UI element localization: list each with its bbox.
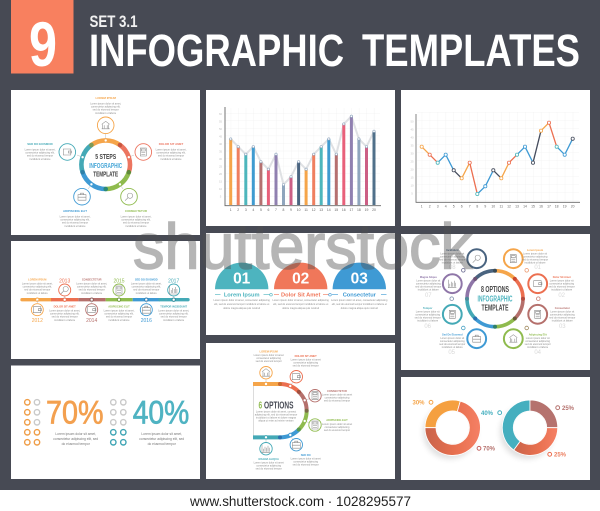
option texts: sed do eiusmod tempor	[415, 286, 442, 288]
option texts: ADIPISCING ELIT	[326, 418, 348, 422]
vertical rule	[252, 384, 254, 437]
timeline texts: incididunt ut labore	[54, 319, 76, 322]
option texts: Lorem ipsum dolor sit amet	[322, 423, 352, 426]
heading: 6 options: 6 OPTIONS	[258, 400, 294, 412]
step texts: Lorem ipsum dolor sit amet,	[90, 102, 121, 106]
timeline texts: SED DO EIUSMOD	[135, 278, 158, 282]
timeline texts: incididunt ut labore	[163, 319, 185, 322]
stat 40 percent: 40%	[133, 395, 189, 431]
timeline texts: incididunt ut labore	[136, 292, 157, 295]
option texts: Dolor Sit Amet	[553, 275, 571, 279]
timeline texts: sed do eiusmod tempor	[79, 289, 105, 292]
y axis labels: 55	[219, 120, 222, 124]
step texts: consectetur adipiscing elit,	[60, 219, 90, 222]
x axis labels: 20	[372, 208, 376, 212]
x axis labels: 13	[515, 204, 519, 208]
timeline texts: consectetur adipiscing elit,	[104, 313, 134, 316]
panel: timeline	[11, 241, 200, 359]
semicircle 01: 01	[233, 270, 251, 288]
x axis labels: 3	[437, 204, 439, 208]
option descriptions: elit, sed do eiusmod tempor incididunt ut labore et	[273, 303, 329, 306]
step icons	[59, 117, 152, 205]
x axis labels: 15	[531, 204, 535, 208]
footer strip with image id: www.shutterstock.com · 1028295577	[189, 493, 411, 509]
step texts: consectetur adipiscing elit,	[91, 106, 121, 109]
donut 40 / 25 / 25	[502, 400, 558, 455]
y axis labels: 50	[219, 127, 222, 131]
timeline texts: consectetur adipiscing elit,	[50, 313, 80, 316]
option texts: sed do eiusmod tempor	[549, 316, 576, 320]
option numbers: 04	[534, 350, 542, 356]
timeline texts: incididunt ut labore	[81, 292, 103, 295]
option texts: incididunt ut labore	[552, 320, 573, 322]
option texts	[415, 248, 576, 349]
subtitle: set 3.1: SET 3.1	[90, 13, 138, 31]
badge: number 9	[11, 0, 74, 80]
step texts: consectetur adipiscing elit,	[121, 219, 151, 222]
y axis labels: 5	[411, 192, 413, 196]
option texts: SED DO	[301, 453, 311, 457]
x axis labels: 5	[453, 204, 455, 208]
ring connectors and step nodes	[77, 134, 134, 189]
timeline texts: DOLOR SIT AMET	[54, 304, 76, 308]
x axis labels: 3	[245, 208, 247, 212]
option texts: Lorem ipsum dolor sit	[550, 310, 574, 314]
option texts: CONSECTETUR	[327, 389, 347, 393]
timeline icons and years: 2016	[141, 318, 152, 324]
timeline texts: consectetur adipiscing elit,	[77, 286, 107, 289]
option texts: Lorem ipsum dolor sit amet	[254, 462, 284, 464]
option texts: sed do eiusmod tempor	[293, 364, 319, 367]
y axis labels: 20	[219, 172, 222, 176]
option texts: Tempor	[423, 306, 432, 310]
badge: number 9: 9	[29, 10, 57, 80]
y axis labels: 10	[219, 187, 222, 191]
y axis labels: 15	[219, 180, 222, 184]
option texts: incididunt ut labore	[527, 346, 549, 349]
y axis labels: 60	[219, 112, 222, 116]
step texts: incididunt ut labore	[30, 158, 51, 161]
option texts: consectetur adipiscing	[440, 340, 465, 343]
stat 40 description: do eiusmod tempor	[148, 442, 177, 446]
x axis labels: 18	[357, 208, 361, 212]
option texts: consectetur adipiscing	[549, 282, 575, 286]
step texts: DOLOR SIT AMET	[159, 142, 184, 146]
panel: line chart	[401, 90, 590, 226]
x axis labels: 6	[461, 204, 463, 208]
center label: TEMPLATE	[93, 170, 118, 178]
axes	[225, 107, 381, 206]
option texts: Lorem ipsum dolor sit amet	[291, 458, 321, 460]
x axis labels: 1	[421, 204, 423, 208]
option texts: incididunt ut labore	[551, 288, 573, 292]
option descriptions: Lorem ipsum dolor sit amet, consectetur adipiscing	[331, 299, 387, 302]
option icon circles	[443, 249, 547, 348]
option texts	[254, 350, 352, 470]
option texts: incididunt ut labore	[417, 320, 439, 322]
arc band	[253, 382, 309, 439]
option texts: DOLOR SIT AMET	[295, 354, 317, 358]
y axis labels: 45	[410, 128, 414, 132]
title	[89, 25, 580, 76]
y axis labels	[219, 112, 222, 198]
option descriptions: dolore magna aliqua quis nostrud	[282, 307, 320, 310]
timeline icons and years: 2014	[86, 318, 97, 324]
bars	[231, 116, 374, 205]
option texts: Incididunt	[446, 248, 459, 252]
step texts: consectetur adipiscing elit,	[156, 152, 186, 155]
option texts: incididunt ut labore	[524, 262, 546, 264]
option titles and connectors: Lorem Ipsum	[224, 293, 260, 299]
option texts: Lorem ipsum dolor sit	[416, 310, 440, 314]
y axis labels: 35	[410, 144, 414, 148]
timeline texts: Lorem ipsum dolor sit amet,	[49, 310, 80, 312]
timeline texts: consectetur adipiscing elit,	[132, 286, 161, 289]
option texts: Lorem ipsum dolor sit amet	[254, 354, 284, 357]
stat 40 description: Lorem ipsum dolor sit amet,	[141, 432, 182, 436]
step texts: SED DO EIUSMOD	[27, 142, 53, 146]
center label	[89, 152, 123, 178]
footer strip with image id	[0, 490, 600, 511]
timeline texts: consectetur adipiscing elit,	[23, 286, 52, 289]
y axis labels	[410, 120, 414, 196]
option texts: Lorem ipsum dolor sit	[523, 252, 547, 256]
option texts: Adipiscing Elit	[529, 332, 547, 336]
option numbers: 01	[534, 265, 542, 271]
x axis labels	[230, 208, 376, 212]
x axis labels: 12	[507, 204, 511, 208]
timeline texts: Lorem ipsum dolor sit amet,	[104, 310, 134, 312]
option numbers: 07	[425, 293, 432, 299]
timeline texts: Lorem ipsum dolor sit amet,	[131, 282, 162, 286]
option titles and connectors: Dolor Sit Amet	[281, 293, 320, 299]
option texts: Lorem ipsum dolor sit	[440, 252, 464, 256]
heading description: adipiscing elit, sed do eiusmod tempor	[255, 414, 297, 416]
x axis labels	[421, 204, 575, 208]
colored line segments	[422, 123, 573, 194]
center label: 5 STEPS	[95, 152, 116, 161]
y axis labels: 5	[220, 194, 222, 198]
stat 70 description: Lorem ipsum dolor sit amet,	[55, 432, 96, 436]
step texts: LOREM IPSUM	[95, 96, 116, 100]
option texts: consectetur adipiscing	[256, 357, 282, 360]
x axis labels: 9	[484, 204, 486, 208]
option texts: LOREM IPSUM	[260, 350, 278, 354]
option texts: sed do eiusmod tempor	[293, 463, 319, 466]
x axis labels: 2	[429, 204, 431, 208]
x axis labels: 15	[334, 208, 338, 212]
option texts: consectetur adipiscing	[550, 314, 575, 316]
y axis labels: 25	[410, 160, 414, 164]
y axis labels: 45	[219, 134, 222, 138]
ring with five segments	[80, 140, 131, 191]
stat 70 description: consectetur adipiscing elit, sed	[53, 437, 98, 441]
donut labels: 40%	[481, 411, 494, 417]
timeline bar	[22, 298, 188, 301]
x axis labels: 2	[237, 208, 239, 212]
x axis labels: 16	[342, 208, 346, 212]
option texts: consectetur adipiscing	[416, 282, 441, 286]
timeline icons and years: 2013	[59, 278, 70, 284]
option texts: sed do eiusmod tempor	[439, 343, 466, 346]
timeline texts: consectetur adipiscing elit,	[159, 313, 189, 316]
option descriptions: elit, sed do eiusmod tempor incididunt ut labore et	[214, 303, 270, 306]
option numbers: 02	[558, 293, 566, 299]
x axis labels: 11	[500, 204, 503, 208]
donut labels: 25%	[562, 406, 575, 412]
semicircle 03	[333, 263, 386, 289]
panel: three semicircle options	[206, 233, 395, 335]
option texts: consectetur adipiscing	[256, 464, 282, 467]
panel: percentage dots	[11, 366, 200, 479]
x axis labels: 7	[469, 204, 471, 208]
timeline nodes	[36, 298, 175, 301]
shadow trend line	[231, 116, 374, 185]
option numbers: 05	[448, 350, 456, 356]
dot matrix 40 percent	[111, 400, 126, 445]
heading description: incididunt ut labore et dolore magna	[256, 416, 296, 420]
option texts: sed do eiusmod tempor	[522, 258, 548, 262]
watermark: shutterstock	[133, 211, 473, 283]
step texts: incididunt ut labore	[95, 112, 117, 115]
timeline texts: sed do eiusmod tempor	[161, 316, 187, 319]
donut 30 / 70	[425, 400, 480, 455]
arc nodes and icons	[260, 366, 321, 455]
panel: 8 options circle	[401, 234, 590, 370]
timeline texts: ADIPISCING ELIT	[108, 304, 130, 308]
heading description: aliqua ut enim ad minim veniam	[258, 420, 294, 422]
y axis labels: 50	[410, 120, 414, 124]
option texts: consectetur adipiscing	[415, 314, 441, 316]
center label	[478, 285, 513, 312]
connector dots	[450, 268, 540, 330]
x axis labels: 10	[297, 208, 301, 212]
x axis labels: 11	[304, 208, 308, 212]
y axis labels: 40	[410, 136, 414, 140]
x axis labels: 16	[539, 204, 543, 208]
option texts: MAGNA ALIQUA	[259, 457, 279, 461]
option descriptions: elit, sed do eiusmod tempor incididunt ut labore et	[332, 303, 387, 306]
timeline icons and years: 2017	[168, 278, 179, 284]
step texts: incididunt ut labore	[64, 225, 86, 228]
step texts: Lorem ipsum dolor sit amet,	[156, 148, 186, 152]
stat 70 description: do eiusmod tempor	[62, 442, 91, 446]
option texts: sed do eiusmod tempor	[439, 258, 466, 262]
x axis labels: 13	[319, 208, 323, 212]
timeline texts: sed do eiusmod tempor	[52, 316, 78, 319]
y axis labels: 30	[410, 152, 414, 156]
x axis labels: 10	[491, 204, 495, 208]
bar tips	[230, 115, 375, 186]
timeline texts: sed do eiusmod tempor	[24, 289, 51, 292]
option titles and connectors	[215, 293, 386, 299]
option texts: Lorem Ipsum	[527, 248, 544, 252]
option texts: sed do eiusmod tempor	[324, 429, 350, 432]
title: INFOGRAPHIC	[89, 25, 344, 76]
x axis labels: 19	[563, 204, 567, 208]
x axis labels: 19	[365, 208, 368, 212]
option texts: Lorem ipsum dolor sit amet	[291, 358, 321, 362]
y axis labels: 10	[410, 184, 414, 188]
step texts: consectetur adipiscing elit,	[25, 152, 55, 155]
option texts: Magna Aliqua	[420, 275, 437, 279]
y axis labels: 30	[219, 157, 222, 161]
timeline icons and years	[31, 278, 180, 324]
x axis labels: 17	[350, 208, 353, 212]
axes	[416, 114, 580, 202]
option texts: sed do eiusmod tempor	[525, 343, 551, 346]
option texts: Lorem ipsum dolor sit	[550, 280, 574, 282]
panel: donut charts	[401, 377, 590, 480]
panel: 5 steps circle	[11, 90, 200, 235]
step texts: sed do eiusmod tempor	[62, 222, 88, 225]
timeline texts: Lorem ipsum dolor sit amet,	[158, 310, 189, 312]
option texts: incididunt ut labore	[442, 262, 463, 264]
step texts: ADIPISCING ELIT	[63, 209, 87, 213]
timeline texts: Lorem ipsum dolor sit amet,	[22, 282, 53, 286]
step texts: Lorem ipsum dolor sit amet,	[60, 216, 90, 218]
donut labels: 30%	[412, 400, 425, 406]
x axis labels: 4	[252, 208, 254, 212]
option texts: Lorem ipsum dolor sit	[440, 337, 464, 340]
x axis labels: 12	[312, 208, 316, 212]
timeline texts: LOREM IPSUM	[28, 278, 46, 282]
x axis labels: 6	[267, 208, 269, 212]
center label: TEMPLATE	[482, 304, 509, 312]
timeline texts: CONSECTETUR	[82, 278, 102, 282]
option texts: incididunt ut labore	[418, 288, 439, 292]
panel: 6 options arc	[206, 343, 395, 479]
data points	[420, 121, 574, 196]
option texts: consectetur adipiscing	[293, 361, 319, 364]
option descriptions: dolore magna aliqua quis nostrud	[341, 307, 378, 310]
y axis labels: 35	[219, 150, 222, 154]
timeline texts: sed do eiusmod tempor	[133, 289, 160, 292]
step texts: Lorem ipsum dolor sit amet,	[25, 148, 55, 152]
timeline icons and years: 2012	[32, 318, 43, 324]
center label: INFOGRAPHIC	[89, 161, 123, 170]
step texts: sed do eiusmod tempor	[158, 155, 184, 158]
ring with eight segments	[465, 269, 525, 329]
option texts: Sed Do Eiusmod	[442, 332, 463, 336]
x axis labels: 17	[547, 204, 551, 208]
donut labels: 25%	[554, 452, 567, 458]
timeline texts: incididunt ut labore	[27, 292, 48, 295]
heading description: Lorem ipsum dolor sit amet, consect	[256, 410, 296, 414]
step texts	[25, 96, 187, 228]
option texts: sed do eiusmod tempor	[549, 286, 575, 288]
option texts: sed do eiusmod tempor	[324, 399, 350, 402]
x axis labels: 9	[290, 208, 292, 212]
x axis labels: 14	[523, 204, 527, 208]
semicircle 02: 02	[292, 270, 309, 288]
timeline texts: TEMPOR INCIDIDUNT	[160, 304, 188, 308]
option texts: Consectetur	[555, 306, 570, 310]
y axis labels: 15	[410, 176, 414, 180]
option descriptions: dolore magna aliqua quis nostrud	[223, 307, 261, 310]
center label: INFOGRAPHIC	[478, 295, 513, 304]
option descriptions: Lorem ipsum dolor sit amet, consectetur adipiscing	[214, 299, 270, 302]
timeline texts: incididunt ut labore	[108, 319, 130, 322]
option texts: sed do eiusmod tempor	[256, 360, 282, 363]
y axis labels: 20	[410, 168, 414, 172]
option texts: consectetur adipiscing	[525, 340, 551, 343]
option numbers: 03	[559, 324, 566, 330]
x axis labels: 5	[260, 208, 262, 212]
option numbers: 08	[449, 265, 456, 271]
step texts: sed do eiusmod tempor	[27, 155, 53, 158]
option texts: consectetur adipiscing	[523, 256, 548, 258]
option texts: sed do eiusmod tempor	[256, 467, 282, 470]
option texts: consectetur adipiscing	[325, 426, 350, 429]
step texts: Lorem ipsum dolor sit amet,	[121, 216, 151, 218]
x axis labels: 1	[230, 208, 232, 212]
option texts: consectetur adipiscing	[293, 460, 319, 463]
option texts: incididunt ut labore	[442, 346, 463, 349]
semicircle 01	[215, 263, 268, 289]
donut labels: 70%	[483, 446, 496, 452]
option texts: Lorem ipsum dolor sit	[416, 280, 440, 282]
donut labels	[412, 400, 575, 458]
option numbers	[424, 265, 566, 356]
semicircle 03: 03	[351, 270, 368, 288]
y axis labels: 25	[219, 164, 222, 168]
x axis labels: 14	[327, 208, 331, 212]
step texts: incididunt ut labore	[160, 158, 182, 161]
option descriptions	[214, 299, 388, 310]
timeline icons and years: 2015	[113, 278, 125, 284]
option descriptions: Lorem ipsum dolor sit amet, consectetur adipiscing	[273, 299, 329, 302]
stat 70 percent: 70%	[46, 395, 104, 431]
timeline texts	[22, 278, 189, 322]
option texts: consectetur adipiscing	[325, 396, 350, 399]
x axis labels: 7	[275, 208, 277, 212]
option texts: Lorem ipsum dolor sit	[526, 337, 550, 340]
x axis labels: 4	[445, 204, 447, 208]
donut shadows	[423, 405, 554, 459]
stat 40 description: consectetur adipiscing elit, sed	[139, 437, 184, 441]
option titles and connectors: Consectetur	[343, 293, 377, 299]
step texts: CONSECTETUR	[125, 209, 148, 213]
option texts: sed do eiusmod tempor	[415, 316, 441, 320]
y axis labels: 40	[219, 142, 222, 146]
x axis labels: 8	[283, 208, 285, 212]
option texts: consectetur adipiscing	[440, 256, 465, 258]
x axis labels: 20	[571, 204, 575, 208]
x axis labels: 8	[476, 204, 478, 208]
step texts: sed do eiusmod tempor	[93, 109, 119, 112]
timeline texts: Lorem ipsum dolor sit amet,	[76, 282, 107, 286]
semicircle 02	[274, 263, 327, 289]
center label: 8 OPTIONS	[481, 285, 509, 294]
panel: bar chart	[206, 90, 395, 226]
timeline texts: sed do eiusmod tempor	[106, 316, 132, 319]
step texts: incididunt ut labore	[126, 225, 147, 228]
option numbers: 06	[424, 324, 432, 330]
step texts: sed do eiusmod tempor	[123, 222, 149, 225]
dot matrix 70 percent	[25, 400, 40, 445]
option texts: Lorem ipsum dolor sit amet	[322, 394, 352, 396]
x axis labels: 18	[555, 204, 559, 208]
